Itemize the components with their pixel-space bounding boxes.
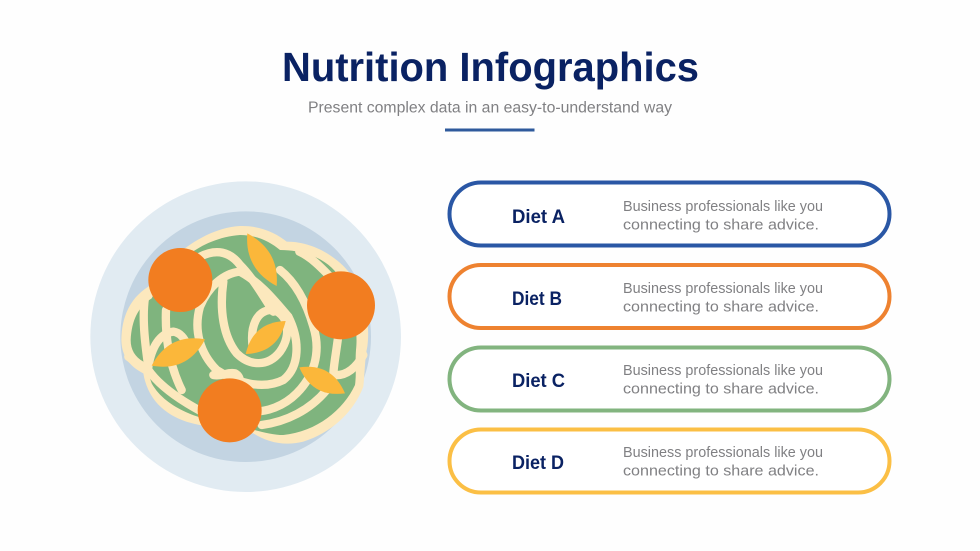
subtitle: Present complex data in an easy-to-understand way [308,100,672,116]
description C: connecting to share advice. [623,380,819,398]
panel: Diet A [450,182,890,246]
panel: Diet C [450,348,890,410]
pasta strands [128,252,363,425]
plate outer rim [90,181,401,492]
description D: Business professionals like you [623,444,823,461]
sauce [131,235,357,435]
pasta silhouette [121,226,368,444]
title: Nutrition Infographics [282,44,699,90]
pill outline D [450,430,890,492]
leaf top [247,233,277,286]
description B: connecting to share advice. [623,298,819,316]
pill outline C [450,348,890,410]
plate inner well [120,211,371,462]
leaf centre [246,321,286,354]
label B: Diet B [512,289,562,310]
description C: Business professionals like you [623,362,823,379]
leaf left [152,338,205,367]
panel: Diet D [450,430,890,492]
panel: Diet B [450,265,890,328]
title underline [445,128,534,132]
leaf right [299,367,345,394]
label D: Diet D [512,453,564,474]
pill outline B [450,265,890,328]
description B: Business professionals like you [623,280,823,297]
description A: Business professionals like you [623,198,823,215]
tomato top left [148,248,212,312]
description D: connecting to share advice. [623,462,819,480]
description A: connecting to share advice. [623,216,819,234]
pill outline A [450,182,890,246]
tomato bottom [198,378,262,442]
tomato right [307,271,375,339]
label A: Diet A [512,207,565,228]
label C: Diet C [512,371,565,392]
illustration: plate of pasta [90,181,401,492]
